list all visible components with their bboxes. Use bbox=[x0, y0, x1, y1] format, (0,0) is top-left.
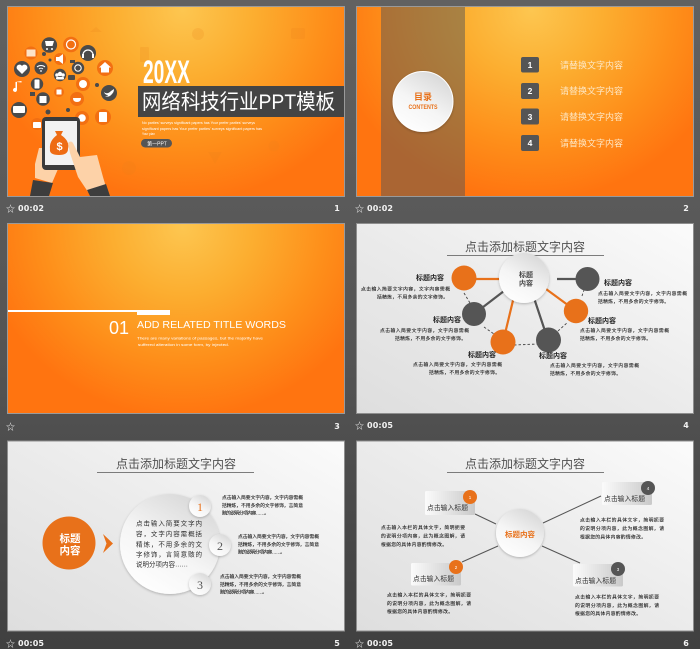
tag 4: 点击输入标题 bbox=[604, 494, 645, 503]
tag 3: 3 bbox=[617, 567, 620, 572]
slide 2 background bbox=[356, 6, 694, 196]
icon cluster: social media icons bbox=[11, 37, 117, 130]
point text 2 bbox=[238, 533, 319, 556]
slide 1 background bbox=[8, 6, 344, 196]
subtitle small text: significant papers has Your prefer parties' surveys significant papers has bbox=[142, 127, 262, 131]
contents item 3: 请替换文字内容 bbox=[560, 111, 623, 122]
orange topic circle: 内容 bbox=[60, 544, 81, 557]
slide 5 background bbox=[8, 441, 344, 631]
tag 2: 2 bbox=[455, 565, 458, 570]
footer slide 1: ☆ bbox=[6, 204, 15, 214]
node label 2 bbox=[380, 315, 469, 342]
paragraph 4: 的说明分项内容，此为概念图解，请 bbox=[575, 602, 659, 609]
node label 5: 标题内容 bbox=[588, 316, 616, 325]
node label 2: 标题内容 bbox=[433, 315, 461, 324]
paragraph 1: 根据您的具体内容酌情修改。 bbox=[381, 541, 447, 548]
paragraph 2: 根据您的具体内容酌情修改。 bbox=[387, 608, 453, 615]
contents item 4: 请替换文字内容 bbox=[560, 138, 623, 148]
node label 4: 标题内容 bbox=[539, 351, 567, 360]
translucent side band bbox=[381, 7, 465, 196]
subtitle small text: Your plan bbox=[142, 132, 155, 136]
number badge 3 bbox=[189, 573, 211, 595]
faint background icons bbox=[90, 27, 305, 175]
point text 1: 赅的说明分项内容……。 bbox=[222, 510, 269, 516]
node label 3 bbox=[413, 350, 502, 376]
point text 1 bbox=[222, 494, 303, 516]
footer slide 4 bbox=[355, 421, 689, 431]
icon: hand holding phone: $ bbox=[56, 141, 63, 153]
point text 2: 括精炼，不用多余的文字修饰，言简意 bbox=[238, 541, 319, 548]
contents badge circle: 目录 bbox=[414, 91, 432, 102]
paragraph 2: 的说明分项内容，此为概念图解，请 bbox=[387, 600, 471, 607]
tag 4: 4 bbox=[647, 486, 650, 491]
contents item 2: 2 bbox=[528, 86, 533, 96]
footer slide 6: ☆ bbox=[355, 639, 364, 649]
contents badge circle bbox=[393, 72, 453, 132]
number badge 1 bbox=[189, 495, 211, 517]
paragraph 1 bbox=[381, 524, 465, 548]
node label 3: 括精炼，不用多余的文字修饰。 bbox=[429, 369, 500, 376]
slide 4 title: 点击添加标题文字内容 bbox=[465, 239, 585, 254]
footer slide 3: 3 bbox=[334, 422, 340, 431]
point text 1: 括精炼，不用多余的文字修饰，言简意 bbox=[222, 502, 303, 509]
subtitle small text bbox=[142, 121, 262, 136]
point text 3 bbox=[220, 573, 301, 596]
tag 2: 点击输入标题 bbox=[413, 574, 454, 583]
footer slide 2: 2 bbox=[683, 204, 689, 213]
tag 4 bbox=[602, 481, 655, 505]
panel: slide 6 mind map bbox=[355, 441, 694, 649]
paragraph 4: 根据您的具体内容酌情修改。 bbox=[575, 610, 641, 617]
number badge 3: 3 bbox=[197, 578, 203, 592]
paragraph 3: 点击输入本栏的具体文字，简明扼要 bbox=[580, 516, 664, 524]
panel: slide 4 network diagram bbox=[355, 224, 694, 431]
large circle with text bbox=[120, 494, 220, 594]
node label 3: 标题内容 bbox=[468, 350, 496, 359]
footer slide 1: 00:02 bbox=[18, 204, 44, 213]
paragraph 1: 的说明分项内容，此为概念图解，请 bbox=[381, 532, 465, 540]
node label 2: 括精炼，不用多余的文字修饰。 bbox=[395, 335, 466, 342]
footer slide 5 bbox=[6, 639, 340, 649]
button bbox=[141, 139, 172, 148]
slide 5 title: 点击添加标题文字内容 bbox=[116, 456, 236, 471]
panel: slide 2 contents bbox=[355, 6, 694, 214]
node label 1: 括精炼，不用多余的文字修饰。 bbox=[377, 294, 448, 300]
paragraph 3: 的说明分项内容，此为概念图解，请 bbox=[580, 525, 664, 532]
node label 1: 标题内容 bbox=[416, 273, 444, 282]
section description bbox=[137, 336, 263, 347]
node label 6: 括精炼，不用多余的文字修饰。 bbox=[598, 298, 669, 305]
arrow chevron bbox=[103, 534, 113, 553]
point text 2: 赅的说明分项内容……。 bbox=[238, 548, 285, 556]
number badge 1: 1 bbox=[197, 500, 203, 514]
orange topic circle bbox=[42, 516, 96, 570]
node label 5: 括精炼，不用多余的文字修饰。 bbox=[580, 335, 651, 342]
central hub bbox=[499, 253, 549, 303]
tag 3 bbox=[573, 562, 625, 586]
footer slide 5: 5 bbox=[334, 639, 340, 648]
tag 1: 1 bbox=[469, 495, 472, 500]
contents item 4 bbox=[521, 135, 623, 151]
contents item 2 bbox=[521, 83, 623, 99]
large circle with text: 点击输入简要文字内 bbox=[136, 518, 202, 528]
large circle with text: 字修饰，言简意赅的 bbox=[136, 550, 202, 558]
footer slide 3 bbox=[6, 422, 340, 432]
footer slide 3: ☆ bbox=[6, 422, 15, 432]
contents item 1: 1 bbox=[528, 60, 533, 70]
footer slide 6: 00:05 bbox=[367, 639, 393, 648]
slide 6 title: 点击添加标题文字内容 bbox=[465, 456, 585, 471]
connector lines bbox=[462, 496, 601, 563]
paragraph 4 bbox=[575, 594, 659, 617]
footer slide 6: 6 bbox=[683, 639, 689, 648]
central circle: 标题内容 bbox=[505, 529, 535, 539]
paragraph 2 bbox=[387, 592, 471, 615]
year heading: 20XX bbox=[143, 54, 190, 90]
node label 4 bbox=[539, 351, 639, 377]
number badge 2: 2 bbox=[217, 539, 223, 553]
panel: slide 5 three points bbox=[6, 441, 344, 649]
slide 6 background bbox=[356, 441, 694, 631]
paragraph 3 bbox=[580, 516, 664, 540]
large circle with text: 说明分项内容…… bbox=[136, 560, 188, 568]
contents item 1: 请替换文字内容 bbox=[560, 60, 623, 70]
footer slide 4: 4 bbox=[683, 421, 689, 430]
panel: slide 3 section title bbox=[6, 224, 344, 432]
large circle with text: 精炼，不用多余的文 bbox=[136, 540, 202, 548]
point text 3: 括精炼，不用多余的文字修饰，言简意 bbox=[220, 581, 301, 588]
paragraph 3: 根据您的具体内容酌情修改。 bbox=[580, 534, 646, 540]
footer slide 4: ☆ bbox=[355, 421, 364, 431]
node label 5: 点击输入简要文字内容，文字内容需概 bbox=[580, 327, 669, 334]
orange topic circle: 标题 bbox=[60, 532, 81, 545]
paragraph 4: 点击输入本栏的具体文字，简明扼要 bbox=[575, 594, 659, 600]
node circles bbox=[452, 266, 600, 354]
section number: 01 bbox=[109, 318, 129, 338]
node label 5 bbox=[580, 316, 669, 342]
contents item 1 bbox=[521, 57, 623, 72]
footer slide 4: 00:05 bbox=[367, 421, 393, 430]
footer slide 2: 00:02 bbox=[367, 204, 393, 213]
footer slide 1 bbox=[6, 204, 340, 214]
node label 6 bbox=[598, 278, 687, 305]
white divider rule bbox=[8, 310, 170, 315]
node label 3: 点击输入简要文字内容，文字内容需概 bbox=[413, 361, 502, 368]
subtitle small text: No parties' surveys significant papers has Your prefer parties' surveys bbox=[142, 121, 255, 125]
point text 3: 点击输入简要文字内容，文字内容需概 bbox=[220, 573, 301, 580]
point text 2: 点击输入简要文字内容，文字内容需概 bbox=[238, 533, 319, 540]
paragraph 2: 点击输入本栏的具体文字，简明扼要 bbox=[387, 592, 471, 598]
tag 1 bbox=[425, 490, 477, 515]
panel: slide 1 cover bbox=[6, 6, 344, 214]
slide 3 background bbox=[8, 224, 344, 414]
footer slide 1: 1 bbox=[334, 204, 340, 213]
node label 6: 标题内容 bbox=[604, 278, 632, 287]
slide 4 background bbox=[356, 224, 694, 414]
footer slide 5: ☆ bbox=[6, 639, 15, 649]
node label 2: 点击输入简要文字内容，文字内容需概 bbox=[380, 327, 469, 334]
footer slide 2 bbox=[355, 204, 689, 214]
button: 第一PPT bbox=[147, 140, 167, 148]
node label 1: 点击输入简要文字内容，文字内容需概 bbox=[361, 286, 450, 292]
contents item 3: 3 bbox=[528, 112, 533, 122]
contents badge circle: CONTENTS bbox=[408, 105, 438, 111]
node label 1 bbox=[361, 273, 450, 300]
icon: hand holding phone bbox=[30, 117, 110, 196]
footer slide 6 bbox=[355, 639, 689, 649]
section heading: ADD RELATED TITLE WORDS bbox=[137, 319, 286, 331]
point text 3: 赅的说明分项内容……。 bbox=[220, 588, 267, 596]
section description: There are many variations of passages, but the majority have bbox=[137, 336, 263, 340]
tag 3: 点击输入标题 bbox=[575, 576, 616, 585]
contents item 4: 4 bbox=[528, 138, 533, 148]
central hub: 内容 bbox=[519, 278, 533, 288]
node label 4: 点击输入简要文字内容，文字内容需概 bbox=[550, 362, 639, 369]
tag 1: 点击输入标题 bbox=[427, 503, 468, 512]
node label 4: 括精炼，不用多余的文字修饰。 bbox=[550, 370, 621, 377]
footer slide 2: ☆ bbox=[355, 204, 364, 214]
point text 1: 点击输入简要文字内容，文字内容需概 bbox=[222, 494, 303, 501]
paragraph 1: 点击输入本栏的具体文字，简明扼要 bbox=[381, 524, 465, 531]
title bar: 网络科技行业PPT模板 bbox=[142, 91, 335, 114]
number badge 2 bbox=[209, 534, 231, 556]
large circle with text: 容，文字内容需概括 bbox=[136, 529, 202, 538]
central circle bbox=[496, 509, 544, 557]
contents item 2: 请替换文字内容 bbox=[560, 85, 623, 96]
central hub: 标题 bbox=[519, 270, 533, 279]
tag 2 bbox=[411, 560, 463, 586]
footer slide 5: 00:05 bbox=[18, 639, 44, 648]
network connectors bbox=[464, 279, 587, 345]
node label 6: 点击输入简要文字内容，文字内容需概 bbox=[598, 290, 687, 297]
contents item 3 bbox=[521, 108, 623, 124]
section description: suffered alteration in some form, by injected. bbox=[138, 343, 229, 347]
